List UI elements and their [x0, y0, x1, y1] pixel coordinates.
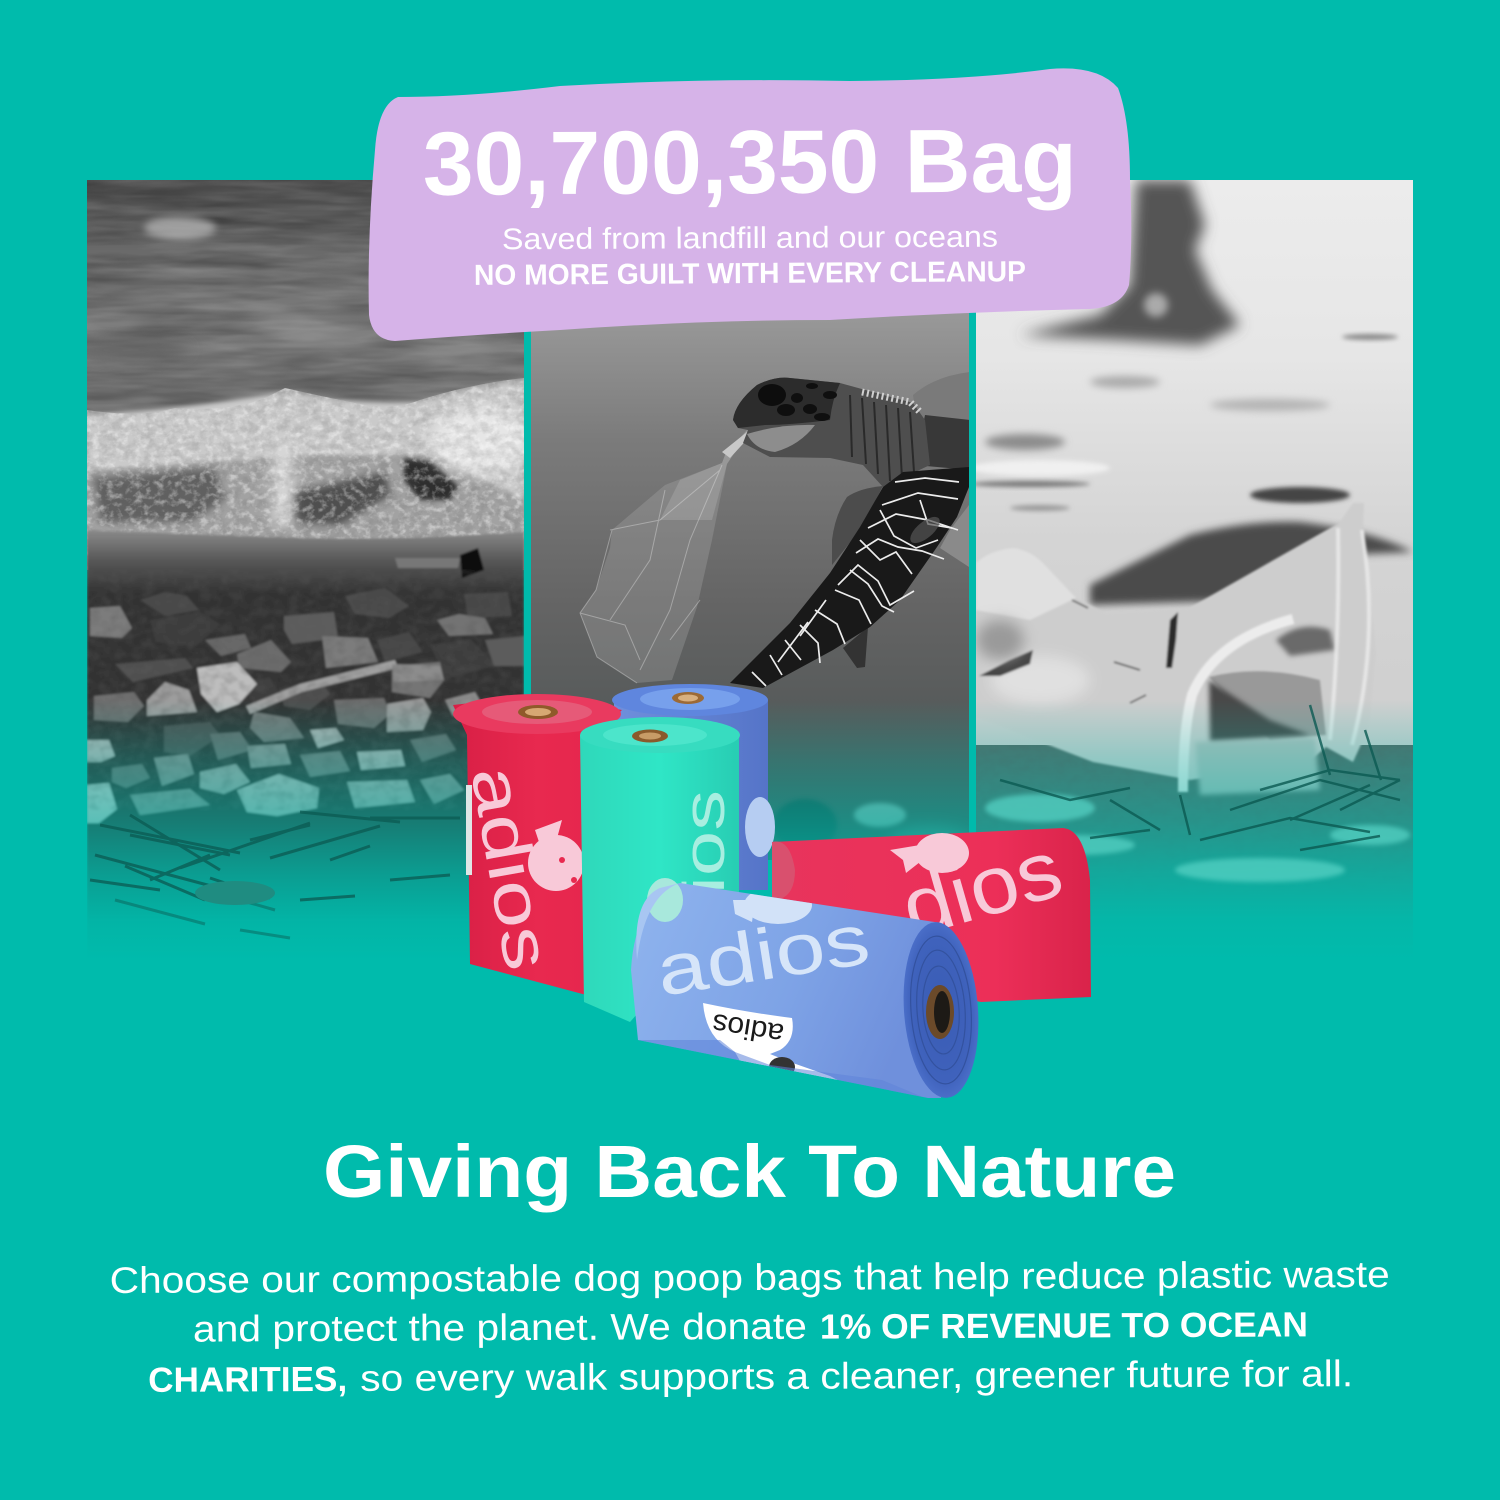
fish logo on red roll [528, 820, 584, 891]
turtle lower body [940, 505, 969, 567]
teal fade overlay [768, 717, 969, 860]
teal fade overlay [976, 700, 1413, 960]
roll: middle teal [580, 717, 740, 1022]
body text: and protect the planet. We donate [193, 1306, 807, 1350]
panel: left photo of waves and rocky shore [70, 180, 530, 980]
end face of roll [898, 920, 984, 1100]
sea turtle [730, 372, 970, 688]
perforation seam [638, 1040, 930, 1100]
dark fish on label [769, 1057, 795, 1072]
roll: back blue [612, 684, 775, 890]
lavender blob shape [369, 68, 1131, 341]
teal fade overlay [87, 710, 470, 960]
turtle shell [913, 372, 969, 410]
body text [110, 1254, 1390, 1400]
plastic cup [976, 503, 1376, 795]
white product label [703, 1003, 838, 1080]
blurred tree [1020, 180, 1240, 345]
body text: so every walk supports a cleaner, greener future for all. [360, 1353, 1353, 1399]
infographic canvas [87, 68, 1413, 1398]
plastic bag [580, 430, 752, 683]
upside down brand text: adios [710, 1007, 786, 1050]
fish logo on right red roll [890, 833, 969, 873]
panel: right photo of plastic cup on beach [976, 180, 1413, 908]
body text: 1% OF REVENUE TO OCEAN [820, 1305, 1308, 1347]
turtle front flipper [730, 467, 969, 688]
title: Giving Back To Nature [323, 1130, 1176, 1213]
adios label on front blue roll: adios [651, 899, 875, 1012]
body text: CHARITIES, [148, 1360, 347, 1400]
roll: front blue [631, 878, 984, 1100]
dark debris ground [976, 745, 1413, 916]
roll: left red [453, 694, 622, 996]
grey underwater backdrop [531, 300, 969, 860]
body text: Choose our compostable dog poop bags that help reduce plastic waste [110, 1254, 1390, 1301]
seabed [774, 798, 962, 842]
callout: lavender bag counter blob [369, 68, 1131, 341]
water surface [70, 180, 524, 420]
adios label on teal roll: adios [672, 790, 737, 985]
subheading: Saved from landfill and our oceans [502, 221, 998, 256]
distant beach patches [970, 334, 1413, 605]
breaking wave foam [87, 375, 530, 570]
tagline: NO MORE GUILT WITH EVERY CLEANUP [474, 256, 1026, 292]
adios label on right red roll: adios [845, 823, 1072, 968]
bright sand backdrop [976, 180, 1413, 745]
dark rock shoreline [87, 530, 524, 918]
turtle back flipper [832, 486, 883, 565]
panel: middle photo of sea turtle and plastic bag [531, 313, 969, 860]
roll: right red [772, 823, 1091, 1002]
driftwood debris strokes [90, 812, 460, 938]
seaweed tangle [985, 705, 1410, 882]
fish logo on front blue roll [733, 894, 812, 924]
turtle head and neck [733, 378, 930, 487]
debris clump [195, 881, 275, 905]
product: group of adios bag rolls [453, 684, 1091, 1100]
adios label on red roll: adios [457, 761, 566, 975]
headline number: 30,700,350 Bag [423, 111, 1077, 215]
